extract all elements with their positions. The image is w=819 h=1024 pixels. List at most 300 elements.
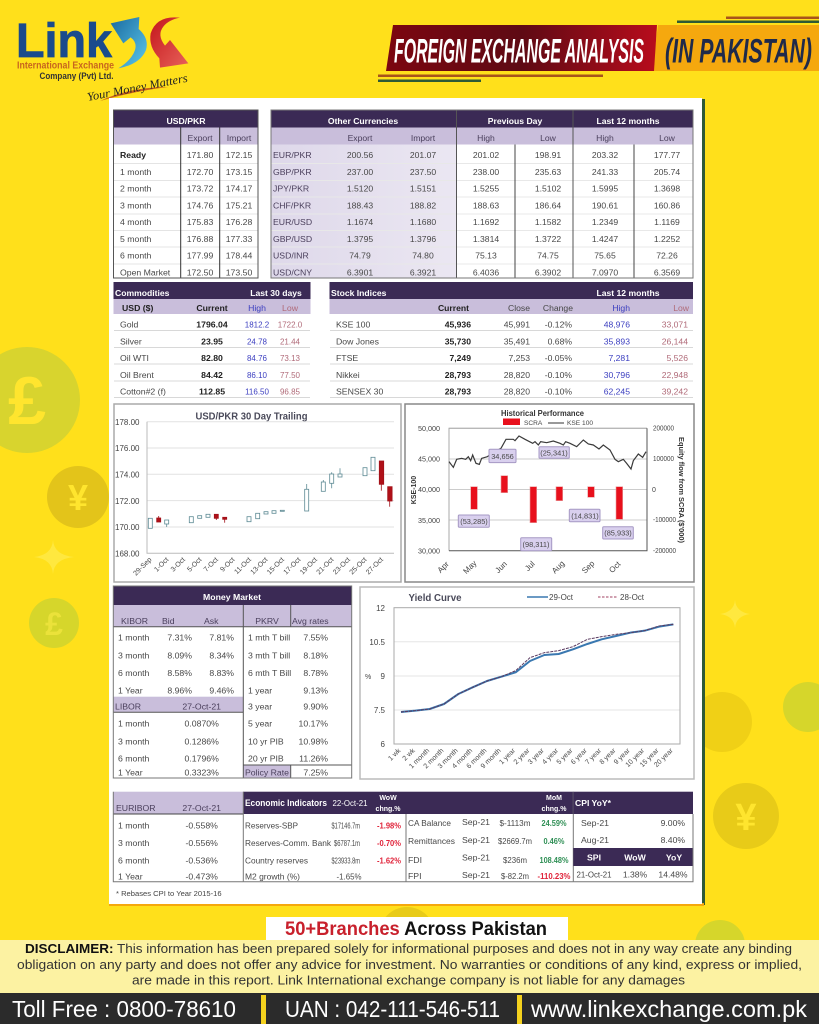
table: stock indices: 48,976 — [604, 320, 630, 330]
table: economic indicators: -1.65% — [336, 872, 362, 882]
table: other currencies: 1.1674 — [347, 217, 373, 227]
table: other currencies: 238.00 — [473, 167, 499, 177]
value callouts — [458, 447, 633, 551]
table: commodities: Last 30 days — [250, 288, 302, 298]
right axis: 0 — [652, 487, 656, 494]
table: other currencies: USD/CNY — [273, 268, 312, 278]
x axis labels: 23-Oct — [332, 556, 352, 576]
table: commodities: Cotton#2 (f) — [120, 386, 166, 396]
x axis labels: 3 month — [437, 747, 460, 770]
table: money market: 1 month — [118, 719, 150, 729]
table: economic indicators: Country reserves — [245, 856, 309, 866]
table: stock indices: KSE 100 — [336, 320, 370, 330]
table: money market: 3 year — [248, 702, 272, 712]
table: economic indicators: chng.% — [542, 806, 567, 813]
table: other currencies: 235.63 — [535, 167, 561, 177]
table: USD/PKR: Open Market — [120, 268, 171, 278]
banner: red — [386, 25, 657, 71]
table: money market: 8.18% — [303, 650, 328, 660]
x axis labels: 1 month — [408, 747, 431, 770]
table: stock indices: 22,948 — [662, 370, 688, 380]
table: stock indices: -0.10% — [545, 370, 572, 380]
table: stock indices: Nikkei — [336, 370, 360, 380]
table: other currencies: 203.32 — [592, 150, 618, 160]
x axis labels: 20 year — [653, 747, 675, 769]
legend — [527, 593, 645, 602]
table: money market: Money Market — [203, 592, 261, 602]
table: economic indicators: -110.23% — [538, 871, 571, 881]
disclaimer: obligation on any party and does not offer any advice for investment. No warranties or conditions of any kind, express or implied, — [17, 958, 802, 972]
table: EURIBOR: 27-Oct-21 — [182, 803, 221, 813]
table: money market: 6 month — [118, 753, 150, 763]
chart title: Yield Curve — [408, 592, 462, 604]
table: USD/PKR: 172.70 — [187, 167, 213, 177]
table: stock indices: -0.05% — [545, 353, 572, 363]
website: www.linkexchange.com.pk — [530, 996, 808, 1022]
table: commodities: 1796.04 — [196, 320, 228, 330]
table: other currencies: 1.3796 — [410, 234, 436, 244]
table: other currencies: 1.5120 — [347, 184, 373, 194]
disclaimer: DISCLAIMER: This information has been prepared solely for informational purposes and does not in any way create any binding — [25, 942, 792, 956]
table: CPI and SPI: 21-Oct-21 — [576, 870, 612, 880]
right axis — [652, 426, 684, 555]
table: commodities: 73.13 — [280, 354, 301, 363]
table: USD/PKR: Import — [227, 133, 252, 143]
table: economic indicators: $17146.7m — [332, 820, 360, 830]
x axis labels: 13-Oct — [250, 556, 269, 576]
table: stock indices: 7,281 — [608, 353, 630, 363]
table: USD/PKR: 173.72 — [187, 184, 213, 194]
x axis labels: 2 year — [513, 747, 532, 766]
month labels: Jun — [493, 559, 509, 575]
table: USD/PKR: 4 month — [120, 217, 152, 227]
x axis labels: 6 month — [466, 747, 488, 770]
table: stock indices: 39,242 — [662, 386, 688, 396]
table: other currencies: Import — [411, 133, 436, 143]
value callouts: (25,341) — [540, 448, 568, 458]
table: commodities: 24.78 — [247, 338, 268, 346]
table: economic indicators: -1.62% — [377, 856, 401, 866]
table: commodities: 21.44 — [280, 338, 301, 346]
table: USD/PKR: 1 month — [120, 167, 152, 177]
table: EURIBOR — [113, 792, 243, 882]
table: other currencies: 1.1169 — [654, 217, 680, 227]
table: USD/PKR: 173.50 — [226, 268, 252, 278]
x axis labels: 6 year — [570, 747, 589, 766]
table: other currencies — [271, 110, 693, 278]
table: money market: 1 year — [248, 685, 272, 695]
table: other currencies: 200.56 — [347, 150, 373, 160]
table: money market: 7.81% — [209, 633, 234, 643]
table: stock indices: 26,144 — [662, 336, 688, 346]
table: money market: 5 year — [248, 719, 272, 729]
table: USD/PKR: Export — [187, 133, 213, 143]
table: commodities: Silver — [120, 336, 142, 346]
table: CPI and SPI: 14.48% — [658, 870, 688, 880]
table: economic indicators: -1.98% — [377, 820, 401, 830]
table: stock indices: 35,730 — [445, 336, 471, 346]
table: other currencies: 72.26 — [656, 250, 678, 260]
logo subtitle: International Exchange — [17, 60, 114, 72]
table: stock indices: 28,793 — [445, 370, 471, 380]
table: USD/PKR: 5 month — [120, 234, 152, 244]
table: USD/PKR: 173.15 — [226, 167, 252, 177]
table: EURIBOR: -0.556% — [186, 838, 218, 848]
table: money market: 9.90% — [303, 702, 328, 712]
report sheet — [109, 98, 705, 906]
table: stock indices: -0.12% — [545, 320, 572, 330]
table: economic indicators: M2 growth (%) — [245, 872, 300, 882]
table: other currencies: 7.0970 — [592, 268, 618, 278]
table: commodities: 84.42 — [201, 370, 223, 380]
table: money market: 6 month — [118, 668, 150, 678]
table: economic indicators: Reserves-SBP — [245, 820, 298, 830]
left axis: 50,000 — [418, 424, 440, 433]
x axis labels: 5 year — [556, 747, 575, 766]
table: commodities: 77.50 — [280, 371, 301, 380]
table: other currencies: 74.79 — [349, 250, 371, 260]
table: economic indicators: Remittances — [408, 836, 456, 846]
table: other currencies: 1.3814 — [473, 234, 499, 244]
x axis labels: 5-Oct — [186, 556, 203, 574]
table: money market: 8.96% — [167, 685, 192, 695]
table: money market: 1 month — [118, 633, 150, 643]
table: other currencies: 6.3569 — [654, 268, 680, 278]
month labels: May — [461, 559, 478, 576]
table: money market: 8.78% — [303, 668, 328, 678]
table: other currencies: 237.00 — [347, 167, 373, 177]
SCRA bars — [471, 476, 623, 523]
table: USD/PKR: 178.44 — [226, 250, 252, 260]
table: economic indicators: $236m — [503, 855, 527, 865]
left axis: 30,000 — [418, 546, 440, 556]
left axis: KSE-100 — [411, 476, 418, 504]
x axis labels: 17-Oct — [283, 556, 302, 576]
table: EURIBOR: -0.473% — [186, 872, 218, 882]
month labels: Oct — [607, 559, 623, 575]
x axis labels: 2 wk — [402, 747, 417, 763]
table: money market: 10.98% — [299, 736, 328, 746]
value callouts: (14,831) — [571, 512, 599, 520]
table: other currencies: High — [477, 133, 495, 143]
x axis labels: 10 year — [625, 747, 647, 769]
table: EURIBOR: 1 Year — [118, 872, 143, 882]
table: money market: 8.34% — [209, 650, 234, 660]
x axis labels: 1 year — [498, 747, 518, 766]
right axis: -100000 — [653, 517, 676, 524]
table: commodities: 116.50 — [245, 388, 269, 396]
table: money market: 10.17% — [299, 719, 328, 729]
table: commodities: Oil WTI — [120, 353, 149, 363]
table: other currencies: 1.1680 — [410, 217, 436, 227]
table: stock indices: 35,893 — [604, 336, 630, 346]
table: other currencies: 74.80 — [412, 250, 434, 260]
table: stock indices: Dow Jones — [336, 336, 380, 346]
table: other currencies: 188.63 — [473, 200, 499, 210]
table: USD/PKR: 174.17 — [226, 184, 252, 194]
table: USD/PKR: 174.76 — [187, 200, 213, 210]
table: stock indices: SENSEX 30 — [336, 386, 383, 396]
chart: USD/PKR 30 day trailing: 168.00 — [115, 550, 140, 558]
table: economic indicators: $-1113m — [500, 818, 530, 828]
table: stock indices: 30,796 — [604, 370, 630, 380]
chart: historical performance — [405, 404, 694, 582]
table: USD/PKR: USD/PKR — [166, 116, 206, 126]
right axis: 200000 — [653, 426, 674, 432]
table: USD/PKR: 2 month — [120, 184, 152, 194]
x axis labels — [132, 556, 385, 577]
background: ¥ — [735, 797, 757, 839]
candlesticks — [148, 457, 375, 528]
table: other currencies: 75.13 — [475, 250, 497, 260]
y axis: 6 — [381, 740, 386, 749]
table: USD/PKR: 172.15 — [226, 150, 252, 160]
table: other currencies: 1.3795 — [347, 234, 373, 244]
disclaimer — [0, 940, 819, 993]
legend: KSE 100 — [567, 420, 593, 427]
table: commodities: 82.80 — [201, 353, 223, 363]
table: commodities: Gold — [120, 320, 139, 330]
y axis: 9 — [381, 672, 386, 681]
table: USD/PKR: 175.83 — [187, 217, 213, 227]
table: stock indices: FTSE — [336, 353, 358, 363]
table: USD/PKR: Ready — [120, 150, 146, 160]
table: other currencies: 177.77 — [654, 150, 680, 160]
x axis labels: 7 year — [584, 747, 604, 766]
value callouts: 34,656 — [491, 452, 514, 461]
table: economic indicators: 22-Oct-21 — [332, 798, 368, 808]
table: other currencies: Other Currencies — [328, 116, 398, 126]
x axis labels: 25-Oct — [349, 556, 368, 576]
disclaimer: are made in this report. Link International exchange company is not liable for any damages — [132, 974, 685, 988]
table: economic indicators: FPI — [408, 871, 422, 881]
y axis: % — [365, 674, 371, 681]
table: stock indices: 45,991 — [504, 320, 530, 330]
table: stock indices: 28,820 — [504, 370, 530, 380]
branches banner: 50+Branches Across Pakistan — [285, 919, 547, 940]
table: economic indicators: CA Balance — [408, 818, 451, 828]
logo — [16, 15, 189, 104]
table: EURIBOR: -0.558% — [186, 820, 218, 830]
toll free: Toll Free : 0800-78610 — [12, 996, 236, 1022]
table: money market: 3 month — [118, 650, 150, 660]
table: money market: 1 Year — [118, 685, 143, 695]
logo arrow: red — [150, 17, 188, 68]
table: other currencies: High — [596, 133, 614, 143]
table: stock indices: Current — [438, 303, 469, 313]
table: money market: 0.1286% — [185, 736, 219, 746]
logo tagline: Your Money Matters — [86, 71, 189, 104]
table: money market: 8.58% — [167, 668, 192, 678]
table: EURIBOR: 6 month — [118, 856, 150, 866]
table: economic indicators: 24.59% — [542, 818, 567, 828]
table: economic indicators: Economic Indicators — [245, 798, 327, 808]
table: other currencies: 188.82 — [410, 200, 436, 210]
table: CPI and SPI: Aug-21 — [581, 835, 609, 845]
x axis labels — [387, 747, 675, 770]
table: other currencies: 6.3902 — [535, 268, 561, 278]
table: money market: 10 yr PIB — [248, 736, 284, 746]
table: money market: 3 month — [118, 736, 150, 746]
table: other currencies: 205.74 — [654, 167, 680, 177]
table: other currencies: 198.91 — [535, 150, 561, 160]
yield lines — [401, 624, 673, 712]
table: economic indicators: Sep-21 — [462, 817, 490, 827]
table: CPI and SPI: Sep-21 — [581, 818, 609, 828]
logo company name: Company (Pvt) Ltd. — [40, 71, 114, 82]
table: money market: 1 mth T bill — [248, 633, 290, 643]
x axis labels: 4 year — [541, 747, 561, 766]
x axis labels: 3 year — [527, 747, 546, 766]
x axis labels: 1 wk — [387, 747, 403, 763]
KSE 100 line — [449, 436, 646, 469]
table: stock indices: 28,820 — [504, 386, 530, 396]
table: CPI and SPI: YoY — [666, 852, 682, 862]
table: other currencies: 1.3698 — [654, 184, 680, 194]
y axis: 12 — [376, 604, 386, 613]
table: money market: 11.26% — [299, 753, 328, 763]
legend: 29-Oct — [549, 593, 574, 602]
table: money market: 7.31% — [167, 633, 192, 643]
chart: USD/PKR 30 day trailing: 170.00 — [115, 523, 140, 532]
table: economic indicators: 108.48% — [540, 855, 569, 865]
table: other currencies: 1.5255 — [473, 184, 499, 194]
month labels: Sep — [580, 559, 597, 575]
table: other currencies: Previous Day — [488, 116, 542, 126]
table: economic indicators: $6787.1m — [334, 838, 360, 848]
table: economic indicators — [243, 792, 573, 882]
x axis labels: 29-Sep — [132, 556, 153, 577]
table: stock indices — [330, 282, 693, 398]
x axis labels: 7-Oct — [203, 556, 220, 574]
table: stock indices: 7,249 — [449, 353, 471, 363]
legend: 28-Oct — [620, 593, 645, 602]
table: other currencies: JPY/PKR — [273, 184, 309, 194]
table: money market: 0.3323% — [185, 767, 219, 777]
table: money market: 0.0870% — [185, 719, 219, 729]
month labels: Aug — [550, 559, 566, 575]
table: other currencies: 6.3901 — [347, 268, 373, 278]
x axis labels: 27-Oct — [365, 556, 385, 576]
table: EURIBOR: 1 month — [118, 820, 150, 830]
chart: USD/PKR 30 day trailing: 176.00 — [115, 444, 140, 453]
table: stock indices: Last 12 months — [596, 288, 660, 298]
table: USD/PKR: 176.88 — [187, 234, 213, 244]
table: other currencies: 6.3921 — [410, 268, 436, 278]
table: economic indicators: chng.% — [376, 806, 401, 813]
table: economic indicators: $2669.7m — [498, 836, 532, 846]
table: money market: 27-Oct-21 — [182, 702, 221, 712]
table: other currencies: 75.65 — [594, 250, 616, 260]
x axis labels: 11-Oct — [233, 556, 253, 576]
x axis labels: 2 month — [423, 747, 445, 770]
table: money market: 6 mth T Bill — [248, 668, 291, 678]
table: CPI and SPI: 8.40% — [661, 835, 685, 845]
table: money market: PKRV — [255, 616, 279, 626]
table: money market: Avg rates — [292, 616, 329, 626]
table: other currencies: EUR/USD — [273, 217, 312, 227]
table: money market: 9.13% — [303, 685, 328, 695]
table: money market: 0.1796% — [185, 753, 219, 763]
x axis labels: 4 month — [451, 747, 474, 770]
y axis: 7.5 — [374, 706, 386, 715]
table: stock indices: 45,936 — [445, 320, 471, 330]
title banner — [378, 16, 819, 82]
table: other currencies: CHF/PKR — [273, 200, 311, 210]
table: commodities: 1812.2 — [245, 320, 270, 330]
table: commodities: 84.76 — [247, 354, 268, 363]
table: money market: Policy Rate — [245, 767, 289, 777]
chart: USD/PKR 30 day trailing: 174.00 — [115, 470, 140, 480]
table: stock indices: Close — [508, 303, 530, 313]
table: money market: 7.55% — [303, 633, 328, 643]
table: other currencies: 1.5151 — [410, 184, 436, 194]
x axis labels: 19-Oct — [299, 556, 319, 576]
month labels — [436, 559, 623, 576]
table: money market: 7.25% — [303, 767, 328, 777]
table: stock indices: Low — [673, 303, 690, 313]
UAN: UAN : 042-111-546-511 — [285, 996, 500, 1022]
table: money market: 8.09% — [167, 650, 192, 660]
table: commodities: 112.85 — [199, 386, 225, 396]
table: USD/PKR: 3 month — [120, 200, 152, 210]
value callouts: (98,311) — [523, 540, 549, 549]
table: commodities: Oil Brent — [120, 370, 154, 380]
table: commodities — [114, 282, 310, 398]
table: EURIBOR: -0.536% — [186, 856, 218, 866]
table: commodities: 23.95 — [201, 336, 223, 346]
x axis labels: 15 year — [639, 747, 661, 769]
tagline swoosh — [100, 87, 168, 101]
table: stock indices: 35,491 — [504, 336, 530, 346]
table: money market: 8.83% — [209, 668, 234, 678]
table: USD/PKR: 171.80 — [187, 150, 213, 160]
table: USD/PKR: 6 month — [120, 250, 152, 260]
value callouts: (85,933) — [604, 528, 632, 538]
contact footer — [0, 993, 819, 1024]
table: other currencies: 6.4036 — [473, 268, 499, 278]
table: money market: 1 Year — [118, 767, 143, 777]
x axis labels: 15-Oct — [266, 556, 286, 576]
chart title: Historical Performance — [501, 408, 584, 418]
table: USD/PKR: 172.50 — [187, 268, 213, 278]
table: money market: 3 mth T bill — [248, 650, 290, 660]
table: other currencies: 1.3722 — [535, 234, 561, 244]
table: economic indicators: FDI — [408, 855, 422, 865]
chart: USD/PKR 30 day trailing — [114, 404, 401, 582]
x axis labels: 9 year — [613, 747, 632, 766]
table: CPI and SPI: SPI — [587, 852, 601, 862]
footnote: * Rebases CPI to Year 2015-16 — [116, 889, 222, 898]
table: other currencies: 237.50 — [410, 167, 436, 177]
table: EURIBOR: 3 month — [118, 838, 150, 848]
table: commodities: 86.10 — [247, 371, 268, 380]
table: economic indicators: Reserves-Comm. Bank — [245, 838, 332, 848]
x axis labels: 9-Oct — [219, 556, 236, 574]
table: stock indices: 5,526 — [666, 353, 688, 363]
left axis — [411, 424, 440, 556]
background: £ — [45, 606, 63, 642]
table: stock indices: -0.10% — [545, 386, 572, 396]
right axis: Equity flow from SCRA ($'000) — [677, 437, 684, 543]
table: commodities: 1722.0 — [278, 320, 303, 330]
month labels: Jul — [523, 559, 537, 573]
table: commodities: USD ($) — [122, 303, 153, 313]
table: money market: 9.46% — [209, 685, 234, 695]
chart: USD/PKR 30 day trailing: 172.00 — [115, 497, 140, 506]
table: other currencies: 1.1582 — [535, 217, 561, 227]
table: other currencies: 160.86 — [654, 200, 680, 210]
